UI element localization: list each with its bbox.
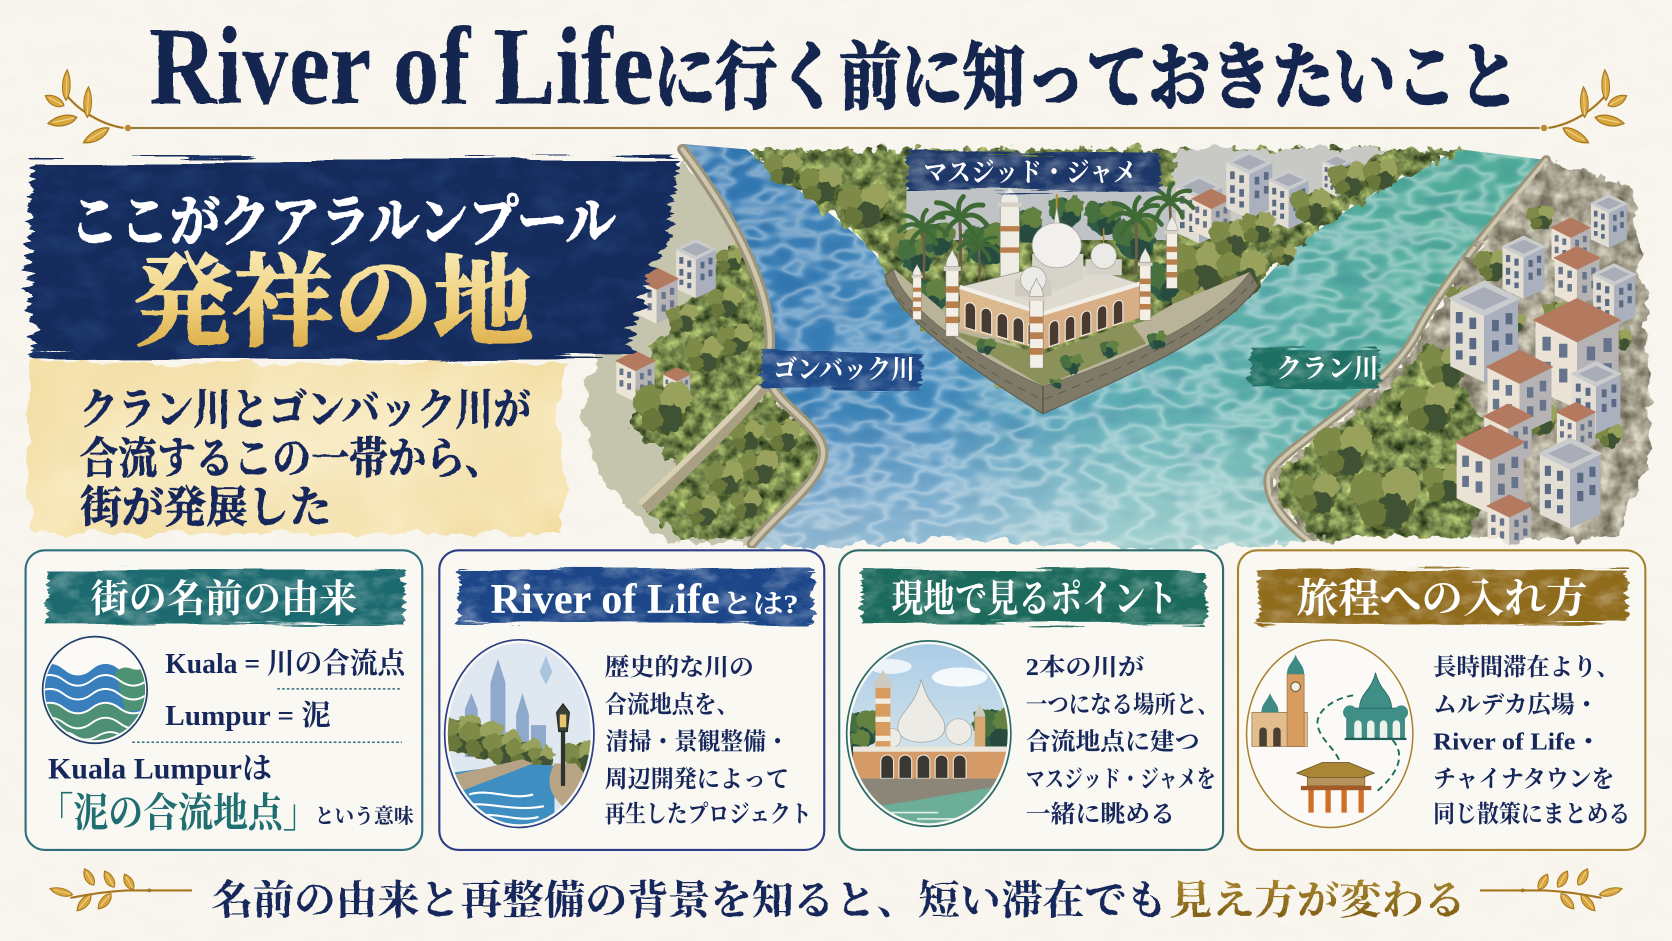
body text: マスジッド・ジャメを [1026, 767, 1216, 793]
body text: 合流地点を、 [605, 690, 739, 718]
title: River of Life [149, 4, 654, 127]
headline: ここがクアラルンプール: ここがクアラルンプール [69, 192, 616, 253]
yellow callout: explanation: クラン川とゴンバック川が [80, 386, 531, 434]
body text: 一緒に眺める [1026, 801, 1175, 828]
mosque roof deck and drums [960, 254, 1140, 314]
title: に行く前に知っておきたいこと [654, 37, 1520, 118]
mosque garden shrubs [976, 332, 1166, 389]
heading [47, 569, 404, 624]
river embankments [682, 149, 1546, 546]
text: meaning: という意味 [315, 805, 414, 828]
panel: River of Lifeとは? [438, 550, 824, 850]
body text: 清掃・景観整備・ [606, 729, 789, 756]
heading: 街の名前の由来 [91, 578, 357, 621]
yellow callout: explanation: 合流するこの一帯から、 [80, 435, 503, 483]
yellow callout: explanation [27, 363, 567, 533]
body text [605, 654, 811, 828]
text: meaning: 「泥の合流地点」 [38, 790, 318, 835]
clock tower [1252, 655, 1307, 746]
icon: walking route between landmarks [1247, 640, 1413, 828]
body text: 再生したプロジェクト [605, 801, 811, 828]
body text: 2本の川が [1026, 654, 1144, 681]
left bank buildings and trees [615, 239, 801, 526]
body text: 合流地点に建つ [1026, 728, 1200, 756]
body text: 周辺開発によって [605, 766, 789, 793]
heading [862, 569, 1205, 624]
body text: 歴史的な川の [605, 654, 754, 681]
bottom and outer fade of illustration [576, 149, 1672, 565]
footer message: 名前の由来と再整備の背景を知ると、短い滞在でも [211, 878, 1168, 923]
route [1317, 695, 1399, 793]
label: クラン川 [1250, 348, 1380, 388]
heading: とは? [722, 589, 799, 619]
icon: mosque view [846, 640, 1012, 828]
heading: 現地で見るポイント [891, 578, 1177, 621]
illustration: river confluence aerial view [576, 144, 1672, 565]
body text: River of Life・ [1433, 730, 1602, 756]
mosque facade with arches [960, 284, 1140, 350]
title rule with laurels [43, 70, 1629, 147]
label: クラン川: クラン川 [1276, 354, 1379, 384]
body text [1026, 654, 1219, 828]
heading [1258, 569, 1627, 624]
panel: 現地で見るポイント [835, 550, 1223, 850]
text: Kuala: Kuala = 川の合流点 [165, 648, 407, 680]
icon: riverside city [438, 640, 600, 828]
chinatown gate [1297, 762, 1374, 813]
footer laurels [49, 867, 1623, 914]
minaret [998, 188, 1022, 277]
text: Kuala Lumpurは: Kuala Lumpurは [48, 752, 272, 785]
body text: チャイナタウンを [1433, 767, 1614, 793]
footer message: 見え方が変わる [1170, 878, 1466, 923]
body text [1433, 654, 1630, 828]
green mosque [1343, 673, 1408, 740]
label: マスジッド・ジャメ: マスジッド・ジャメ [923, 157, 1137, 187]
label: ゴンバック川: ゴンバック川 [773, 355, 915, 385]
body text: 長時間滞在より、 [1433, 654, 1620, 681]
second embankment path [645, 386, 766, 510]
heading: River of Life [491, 576, 720, 623]
text: Lumpur: Lumpur = 泥 [165, 700, 331, 732]
mosque domes [1020, 194, 1116, 292]
panel: 旅程への入れ方 [1238, 550, 1645, 850]
panel: 街の名前の由来 [26, 550, 422, 850]
body text: ムルデカ広場・ [1433, 691, 1598, 718]
heading: 旅程への入れ方 [1297, 576, 1588, 621]
icon: river waves [36, 637, 149, 746]
navy brush panel: origin headline [28, 160, 678, 359]
headline: 発祥の地: 発祥の地 [133, 248, 533, 359]
title [149, 4, 1520, 127]
yellow callout: explanation: 街が発展した [80, 485, 332, 533]
heading [459, 569, 813, 624]
mosque: Masjid Jamek [911, 188, 1179, 389]
water: Gombak and Klang rivers [682, 144, 1546, 549]
street lamp [557, 704, 569, 786]
right bank land [1275, 160, 1651, 552]
label: ゴンバック川 [761, 351, 921, 390]
body text: 一つになる場所と、 [1026, 691, 1219, 718]
left bank land [581, 160, 826, 544]
body text: 同じ散策にまとめる [1433, 801, 1630, 828]
central land behind the mosque [746, 149, 1463, 405]
mosque island embankment [885, 269, 1258, 414]
